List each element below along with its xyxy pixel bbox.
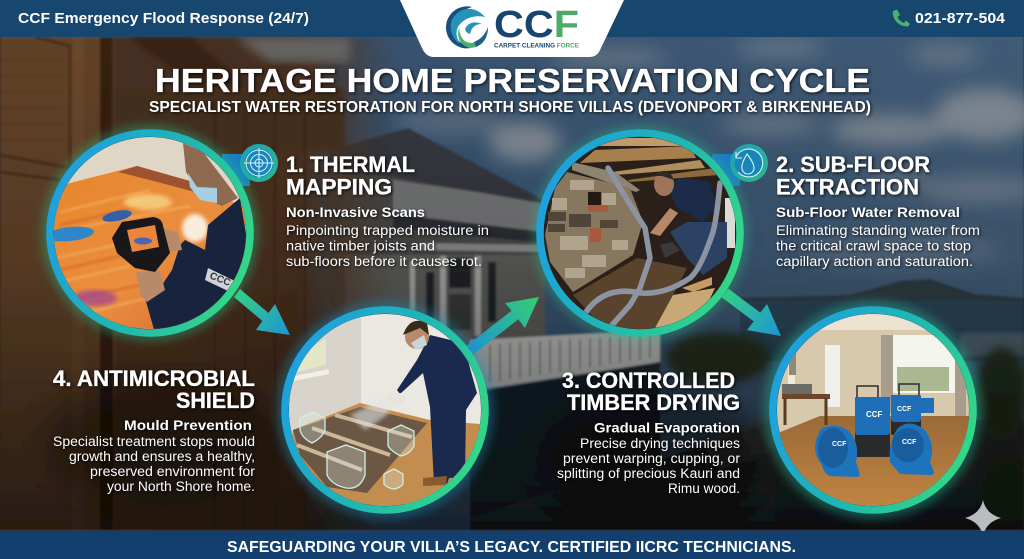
- step 2 heading: EXTRACTION: [776, 174, 919, 200]
- step 3 text: Precise drying techniques: [580, 436, 740, 451]
- step 3 heading: TIMBER DRYING: [567, 390, 740, 415]
- step 1 text: [286, 205, 489, 269]
- stone wall: [545, 172, 643, 292]
- title: HERITAGE HOME PRESERVATION CYCLE: [155, 62, 870, 99]
- step 4 text: Mould Prevention: [124, 418, 252, 433]
- step 4 text: your North Shore home.: [107, 479, 255, 494]
- step 1 heading: [286, 152, 415, 200]
- phone number: 021-877-504: [915, 11, 1005, 27]
- step 1 heading: 1. THERMAL: [286, 152, 415, 177]
- step 2 text: Eliminating standing water from: [776, 223, 980, 238]
- step 2 text: the critical crawl space to stop: [776, 238, 971, 254]
- logo tagline: CARPET CLEANING FORCE: [494, 44, 579, 50]
- step 4 heading: [53, 366, 255, 413]
- step 3 text: [557, 420, 741, 496]
- icon badge: thermal target: [222, 144, 278, 186]
- step 1 text: Pinpointing trapped moisture in: [286, 223, 489, 238]
- panel: step 3 photo: [276, 301, 494, 519]
- step 3 heading: 3. CONTROLLED: [562, 368, 735, 393]
- shield icons: [300, 412, 414, 489]
- step 4 text: [53, 418, 256, 494]
- subtitle: SPECIALIST WATER RESTORATION FOR NORTH SHORE VILLAS (DEVONPORT & BIRKENHEAD): [149, 99, 871, 116]
- step 2 heading: [776, 152, 930, 200]
- step 2 text: Sub-Floor Water Removal: [776, 205, 960, 220]
- icon: sparkle: [965, 500, 1001, 536]
- step 1 heading: MAPPING: [286, 174, 392, 200]
- step 1 text: Non-Invasive Scans: [286, 205, 425, 220]
- floor: [573, 258, 687, 330]
- panel: step 4 photo: CCF: [866, 410, 883, 419]
- panel: step 4 photo: [764, 301, 982, 519]
- arrow: step 2 to step 3: [467, 297, 539, 354]
- step 4 text: preserved environment for: [90, 464, 256, 479]
- arrow: step 1 to step 2: [234, 289, 290, 335]
- step 3 text: prevent warping, cupping, or: [563, 451, 741, 466]
- step 3 heading: [562, 368, 740, 415]
- technician: [397, 335, 477, 484]
- step 3 text: Rimu wood.: [668, 481, 740, 496]
- step 1 text: sub-floors before it causes rot.: [286, 254, 482, 269]
- panel: step 4 photo: CCF: [832, 441, 847, 448]
- step 2 text: capillary action and saturation.: [776, 254, 973, 269]
- drying machines: [857, 386, 878, 397]
- panel: step 1 photo: CCC: [208, 271, 232, 289]
- panel: step 2 photo: [532, 125, 748, 341]
- logo wordmark: CCF: [494, 4, 579, 46]
- arrow: step 3 to step 4: [722, 289, 781, 336]
- step 4 heading: 4. ANTIMICROBIAL: [53, 366, 255, 391]
- hoses: [586, 168, 720, 325]
- panel: step 4 photo: CCF: [902, 439, 917, 446]
- panel: step 4 photo: CCF: [897, 406, 912, 413]
- thermal camera: [112, 217, 170, 272]
- icon badge: water drop: [712, 144, 768, 186]
- top bar: [0, 0, 1024, 37]
- technician: [146, 198, 246, 329]
- step 4 heading: SHIELD: [176, 388, 255, 413]
- top bar label: CCF Emergency Flood Response (24/7): [18, 11, 309, 27]
- icon: CCF swirl: [446, 6, 488, 48]
- step 2 text: [776, 205, 980, 269]
- bottom banner: SAFEGUARDING YOUR VILLA’S LEGACY. CERTIFIED IICRC TECHNICIANS.: [227, 539, 796, 556]
- step 1 text: native timber joists and: [286, 238, 435, 254]
- step 4 text: growth and ensures a healthy,: [69, 449, 255, 464]
- logo panel: [400, 0, 624, 57]
- step 4 text: Specialist treatment stops mould: [53, 434, 255, 449]
- step 2 heading: 2. SUB-FLOOR: [776, 152, 930, 177]
- step 3 text: Gradual Evaporation: [594, 420, 740, 436]
- icon: phone: [893, 10, 910, 27]
- bottom banner: [0, 531, 1024, 559]
- technician: [668, 178, 717, 222]
- step 3 text: splitting of precious Kauri and: [557, 466, 740, 481]
- panel: step 1 photo: [40, 125, 258, 341]
